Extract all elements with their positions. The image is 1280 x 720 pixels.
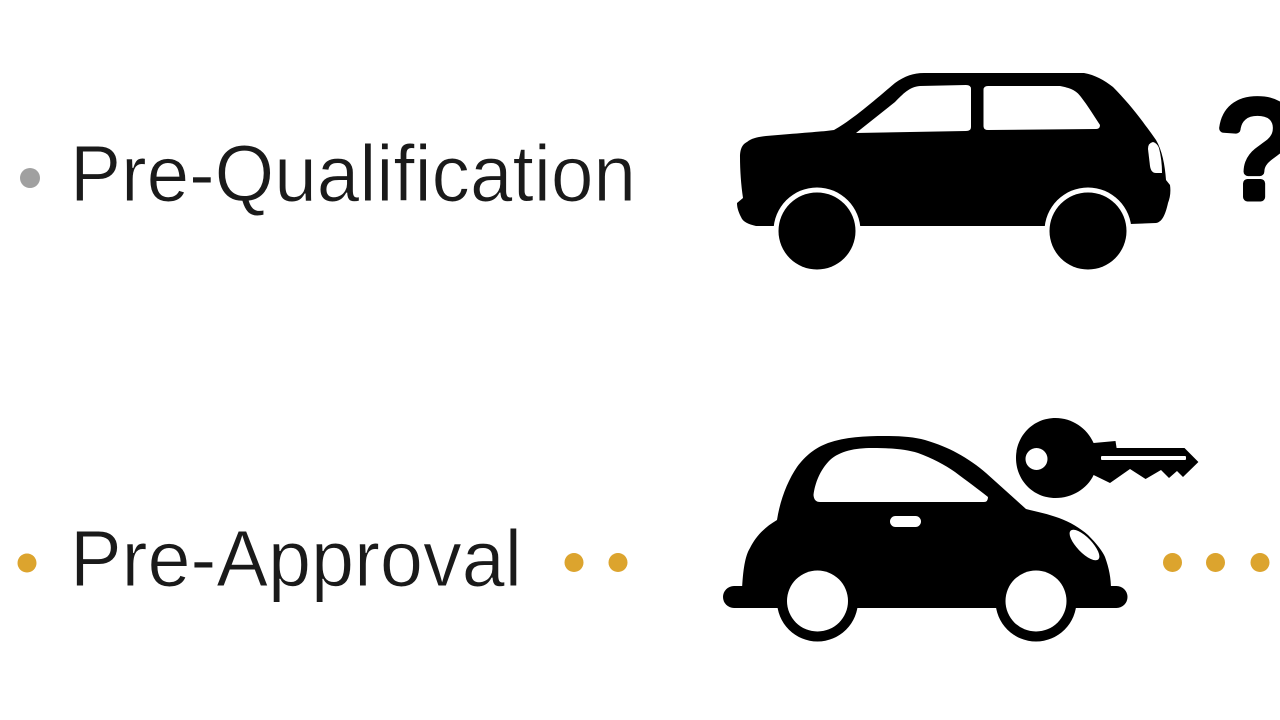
rear wheel xyxy=(1050,192,1126,270)
icon: key xyxy=(1016,418,1198,498)
bullet: grey xyxy=(20,168,40,188)
tail light xyxy=(1148,142,1162,173)
icon: round car xyxy=(723,436,1128,642)
row: pre-qualification xyxy=(20,73,1280,274)
headlight xyxy=(1065,525,1104,565)
front wheel xyxy=(778,192,856,270)
window xyxy=(814,448,988,502)
bullet: gold xyxy=(18,554,36,572)
wheel arch gaps xyxy=(774,188,860,274)
rear window xyxy=(984,86,1100,130)
icon: hatchback car xyxy=(737,73,1170,274)
front window xyxy=(856,85,971,133)
dots after car xyxy=(1163,553,1270,572)
wheels xyxy=(777,560,858,642)
row: pre-approval xyxy=(18,418,1270,642)
door handle xyxy=(890,516,921,527)
heading: Pre-Approval: Pre-Approval xyxy=(70,514,522,603)
dots after heading xyxy=(564,553,628,572)
heading: Pre-Qualification: Pre-Qualification xyxy=(70,129,636,218)
